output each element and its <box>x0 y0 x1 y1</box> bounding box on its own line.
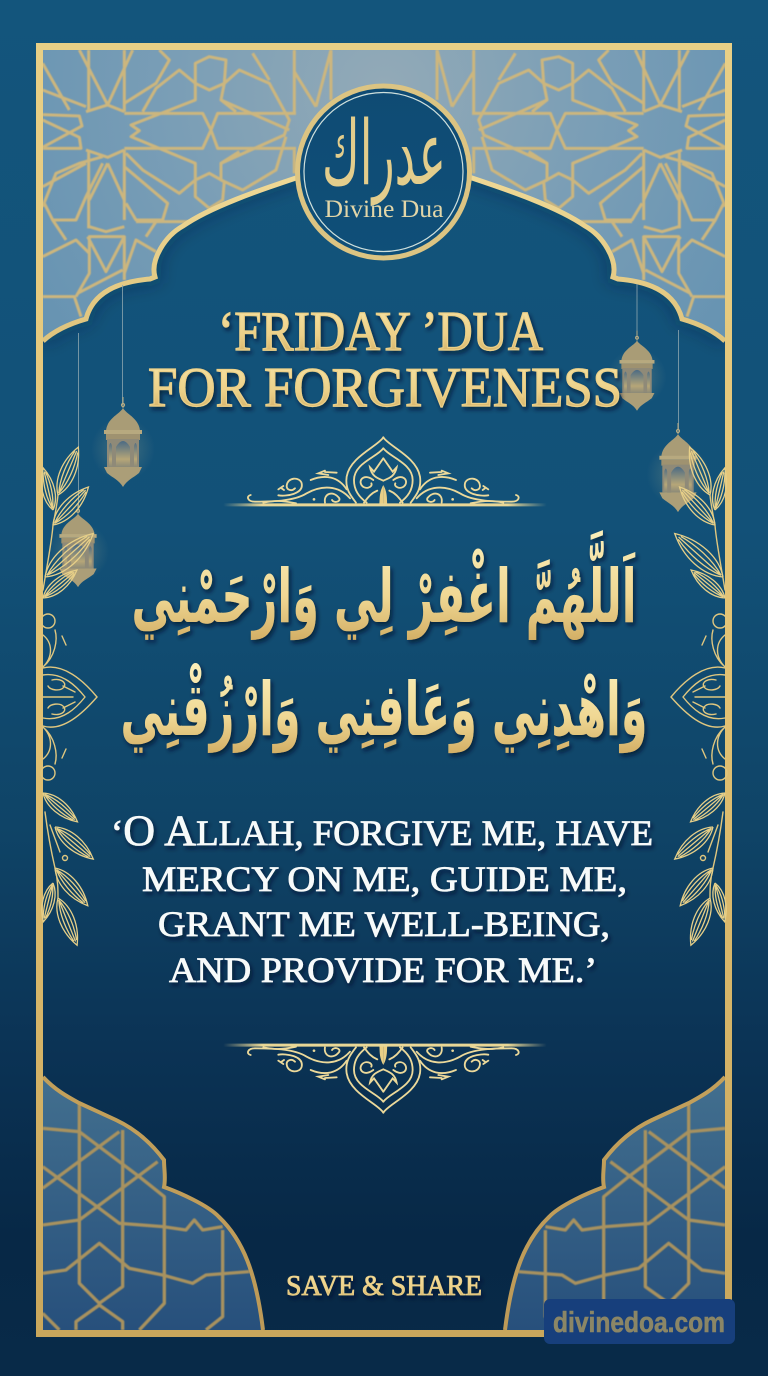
arabic dua <box>120 531 648 754</box>
icon: hanging lantern left far <box>47 333 109 587</box>
title: ‘FRIDAY ’DUA <box>218 301 543 363</box>
icon: hanging lantern left near <box>91 285 155 487</box>
english translation: MERCY ON ME, GUIDE ME, <box>142 859 627 899</box>
logo badge <box>298 86 470 258</box>
watermark badge <box>544 1299 735 1344</box>
right floral side decoration <box>668 444 731 948</box>
bottom ornament divider <box>223 1044 547 1113</box>
save and share label: SAVE & SHARE <box>286 1271 482 1302</box>
panel: bottom corner lattice patterns <box>43 1060 725 1330</box>
title: FOR FORGIVENESS <box>148 357 622 419</box>
logo calligraphy: عدراك <box>322 103 446 206</box>
panel: top lattice pattern <box>43 50 725 350</box>
watermark badge: divinedoa.com <box>553 1307 725 1339</box>
english translation <box>111 808 653 990</box>
top ornament divider <box>223 437 547 506</box>
english translation: AND PROVIDE FOR ME.’ <box>169 950 597 990</box>
english translation: GRANT ME WELL-BEING, <box>158 904 610 944</box>
panel: central arch <box>43 140 725 1330</box>
left floral side decoration <box>37 444 100 948</box>
logo wordmark: Divine Dua <box>324 196 444 223</box>
icon: hanging lantern right far <box>647 330 709 512</box>
icon: hanging lantern right near <box>608 284 666 411</box>
english translation: ‘O ALLAH, FORGIVE ME, HAVE <box>111 808 653 855</box>
title <box>148 301 622 419</box>
